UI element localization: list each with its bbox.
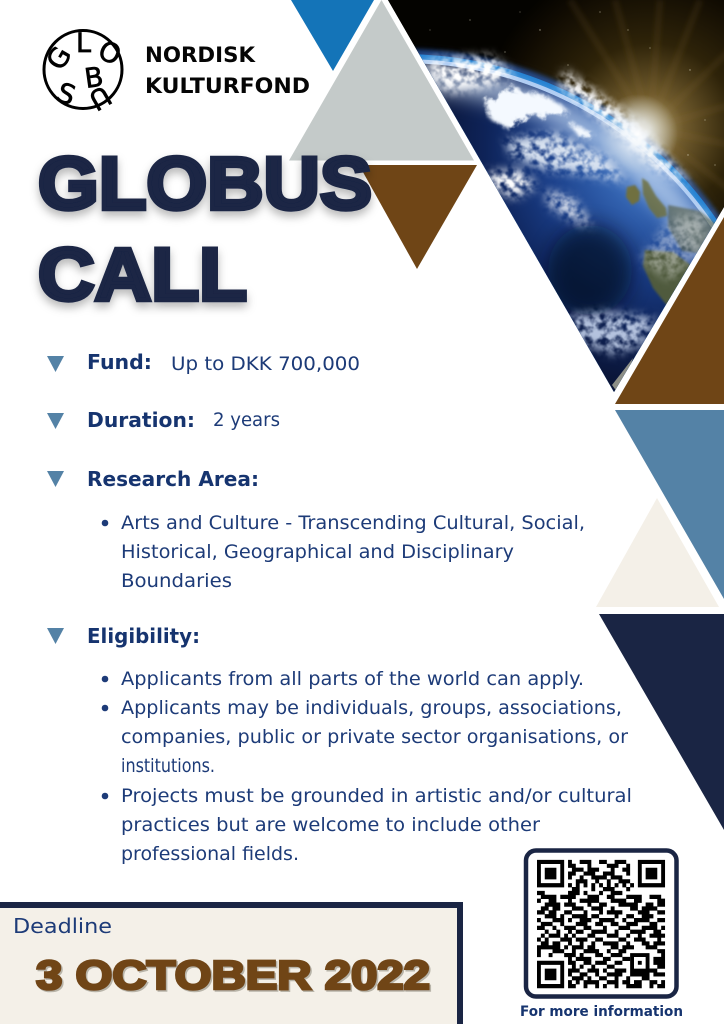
section: eligibility: practices but are welcome to include other — [121, 815, 541, 836]
triangle: navy — [599, 614, 724, 830]
sun flare — [602, 96, 676, 170]
section: eligibility: institutions. — [121, 756, 215, 777]
logo circle — [44, 30, 122, 108]
title: GLOBUS — [38, 142, 372, 225]
logo letters: S — [53, 77, 79, 112]
section: research area: Arts and Culture - Transcending Cultural, Social, — [121, 513, 585, 534]
section: eligibility: Projects must be grounded in artistic and/or cultural — [121, 786, 632, 807]
deadline box — [0, 905, 460, 1024]
deadline date: 3 OCTOBER 2022 — [36, 952, 430, 998]
globe — [420, 54, 716, 392]
sun rays — [570, 0, 724, 190]
logo letters: G — [41, 42, 78, 75]
section: eligibility: Applicants may be individuals, groups, associations, — [121, 698, 622, 719]
section: eligibility: Eligibility: — [87, 624, 200, 648]
section: duration — [47, 408, 280, 432]
marker — [47, 628, 64, 644]
marker — [47, 356, 64, 372]
triangle: brown large — [615, 217, 724, 404]
section: duration: 2 years — [213, 410, 280, 431]
ocean darkening — [548, 225, 632, 315]
logo letters: L — [76, 28, 91, 59]
section: fund: Up to DKK 700,000 — [171, 354, 360, 375]
title: CALL — [38, 233, 247, 316]
logo letters: B — [83, 62, 105, 95]
section: fund — [47, 350, 360, 375]
section: research area — [47, 467, 585, 592]
marker — [47, 471, 64, 487]
triangle: cream — [596, 498, 719, 607]
logo letters: O — [93, 35, 126, 72]
triangle: brown small — [359, 165, 477, 269]
triangle: steel blue — [615, 410, 724, 599]
section: fund: Fund: — [87, 350, 152, 374]
QR code — [526, 850, 676, 996]
section: research area: Historical, Geographical and Disciplinary — [121, 542, 514, 563]
logo — [41, 28, 126, 116]
stars — [430, 11, 716, 166]
section: duration: Duration: — [87, 408, 195, 432]
organisation name: KULTURFOND — [145, 74, 310, 98]
section: eligibility: companies, public or private sector organisations, or — [121, 727, 628, 748]
section: research area: Research Area: — [87, 467, 259, 491]
deadline label: Deadline — [13, 914, 112, 938]
section: eligibility: professional fields. — [121, 844, 299, 865]
land masses — [626, 178, 722, 308]
triangle: grey — [289, 0, 474, 160]
organisation name — [145, 43, 310, 98]
earth photo triangle — [388, 0, 724, 392]
QR modules — [537, 862, 665, 986]
section: eligibility — [47, 624, 632, 865]
clouds: solid white areas — [486, 88, 593, 138]
section: research area: Boundaries — [121, 571, 232, 592]
triangle: blue — [291, 0, 374, 71]
clouds: textured areas — [430, 56, 710, 354]
marker — [47, 413, 64, 429]
logo letters: U — [83, 79, 116, 116]
land corner — [612, 358, 633, 390]
atmosphere halo — [415, 46, 720, 392]
QR caption: For more information — [520, 1004, 683, 1020]
logo letters — [41, 28, 126, 116]
title — [38, 142, 372, 316]
bright atmosphere band — [418, 52, 718, 264]
section: eligibility: Applicants from all parts of the world can apply. — [121, 669, 584, 690]
organisation name: NORDISK — [145, 43, 256, 67]
